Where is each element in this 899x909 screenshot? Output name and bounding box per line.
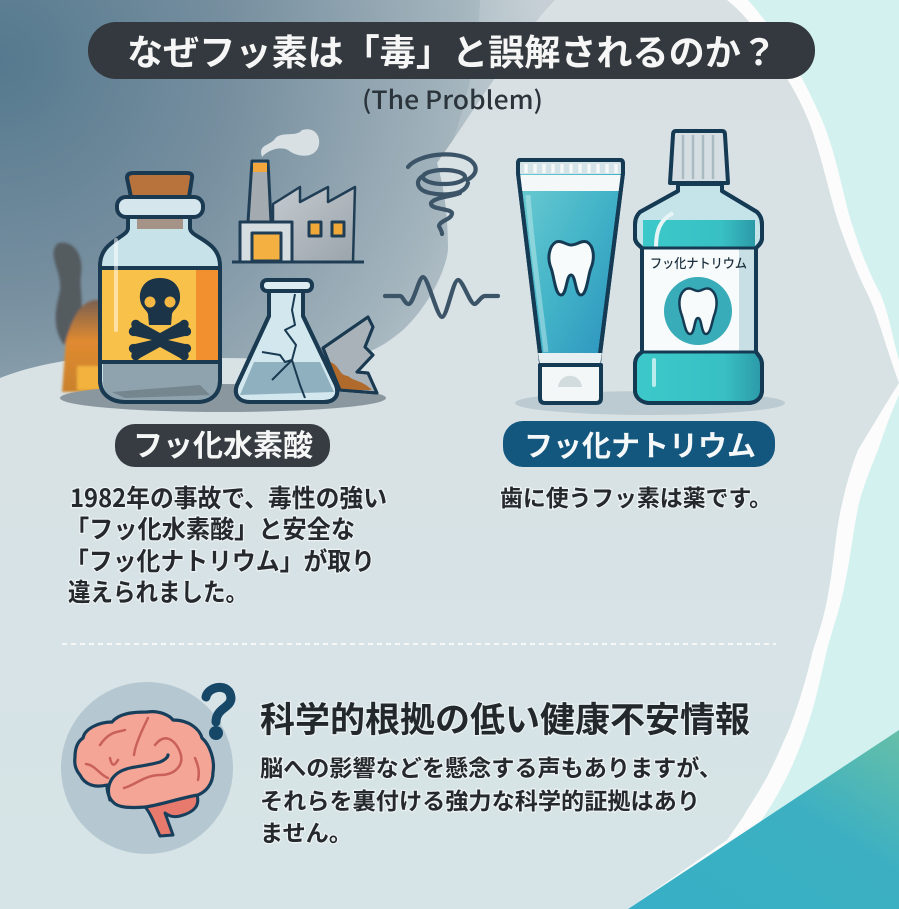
icon: rusty shard — [323, 317, 377, 393]
icon: mouthwash bottle — [635, 131, 762, 403]
skull and crossbones — [129, 278, 191, 360]
question mark — [206, 687, 231, 722]
icon: factory — [232, 129, 364, 262]
icon: wave line — [385, 277, 498, 317]
text block: accident explanation: 「フッ化水素酸」と安全な — [65, 510, 355, 546]
text block: accident explanation: 違えられました。 — [68, 573, 248, 609]
text block: brain claim: 脳への影響などを懸念する声もありますが、 — [260, 749, 722, 783]
icon: cracked flask — [236, 280, 337, 402]
text block: accident explanation — [65, 479, 387, 609]
icon: confusion swirl — [408, 154, 476, 234]
title pill: なぜフッ素は「毒」と誤解されるのか？ — [127, 24, 777, 76]
icon: brain with question mark — [61, 682, 233, 854]
text block: brain claim — [260, 749, 722, 848]
icon: toothpaste tube — [518, 160, 623, 403]
text block: accident explanation: 「フッ化ナトリウム」が取り — [65, 542, 375, 578]
subtitle: (The Problem) — [362, 81, 543, 117]
shadow under dental products — [515, 391, 785, 415]
shadow under bottle and flask — [60, 384, 386, 412]
text block: fluoride in dentistry: 歯に使うフッ素は薬です。 — [500, 479, 772, 513]
icon: fire and smoke — [53, 243, 106, 392]
icon: poison bottle — [100, 173, 220, 402]
brain — [75, 712, 213, 807]
heading: low-evidence health information: 科学的根拠の低い健康不安情報 — [260, 692, 750, 743]
tooth on label — [679, 288, 717, 334]
label pill: sodium fluoride: フッ化ナトリウム — [524, 423, 756, 465]
text block: accident explanation: 1982年の事故で、毒性の強い — [70, 479, 387, 515]
tooth on tube — [549, 242, 593, 295]
text block: brain claim: ません。 — [260, 814, 352, 848]
bottle label text: フッ化ナトリウム — [650, 253, 747, 272]
text block: brain claim: それらを裏付ける強力な科学的証拠はあり — [260, 782, 700, 816]
dotted divider — [62, 643, 776, 645]
brain stem and cerebellum — [145, 795, 198, 836]
label pill: hydrofluoric acid: フッ化水素酸 — [133, 421, 313, 465]
